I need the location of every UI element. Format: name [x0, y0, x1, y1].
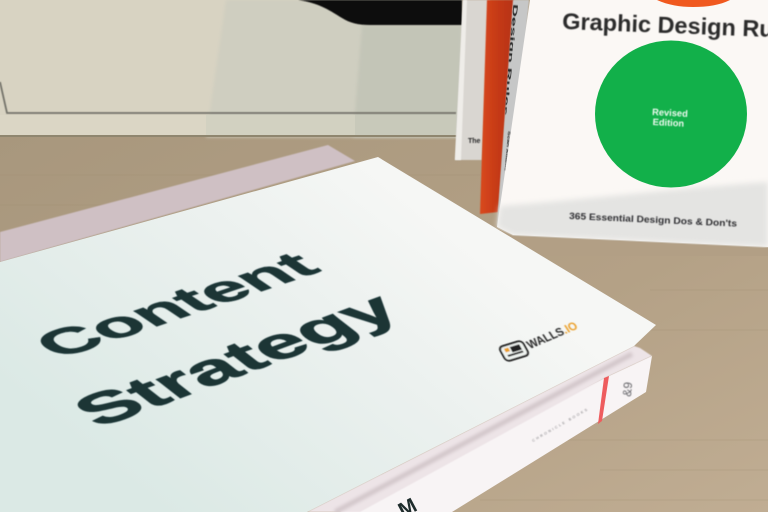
green circle [595, 40, 747, 188]
black drawer handle cutout [298, 0, 462, 25]
edition label: Revised [652, 107, 688, 119]
book title: Graphic Design Ru [562, 8, 768, 42]
book cover [0, 157, 656, 512]
cover title: Strategy [59, 283, 415, 436]
wooden desk surface [0, 135, 768, 512]
spine mark: &9 [620, 381, 635, 397]
lilac endpaper sheet [0, 145, 355, 262]
Walls.io logo [499, 319, 580, 362]
cover shadow band [497, 182, 768, 247]
book spine side [307, 346, 652, 512]
orange book spine [480, 0, 514, 214]
edition label: Edition [652, 117, 685, 129]
cover title [20, 244, 415, 436]
book spine: Design Rules [501, 4, 518, 116]
book spine: Sean Adams [503, 131, 511, 171]
book spine [497, 0, 529, 232]
book tagline: 365 Essential Design Dos & Don'ts [569, 211, 737, 229]
spine text fragment: The [468, 138, 481, 145]
publisher name: CHRONICLE BOOKS [532, 407, 590, 443]
front book: Graphic Design Rules [480, 0, 768, 256]
orange circle [657, 0, 730, 7]
back white book spine [455, 0, 490, 160]
spine groove [307, 346, 652, 512]
logo icon [499, 340, 529, 362]
redraw lower edge of cover against the desk [480, 228, 768, 256]
white cabinet drawer [0, 0, 462, 137]
main book [0, 157, 656, 512]
cover title: Content [20, 244, 332, 365]
logo wordmark: WALLS.IO [524, 319, 580, 352]
red stripe [598, 376, 609, 424]
book cover [497, 0, 768, 247]
edition label [652, 107, 688, 129]
